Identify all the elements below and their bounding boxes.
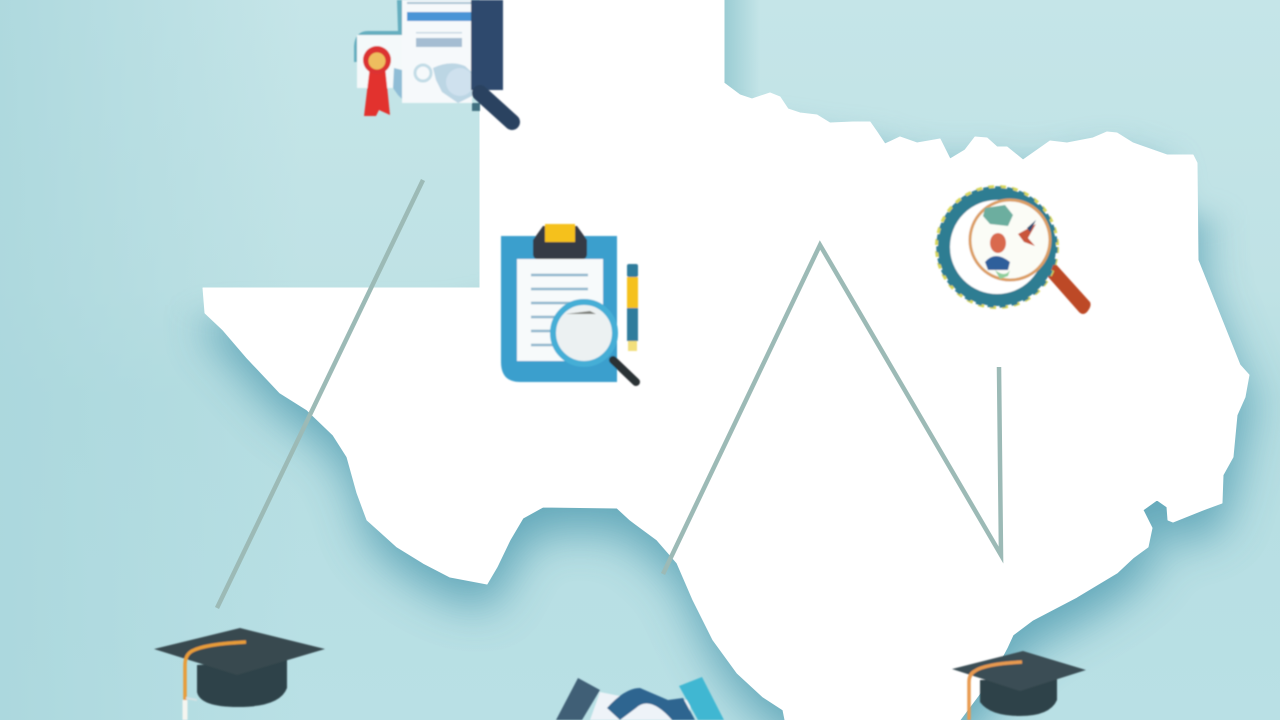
magnifier [553, 302, 636, 382]
tassel [969, 662, 1022, 720]
icon: seal with magnifier and people [936, 186, 1091, 314]
connector line: zigzag [663, 245, 1001, 574]
icon: handshake [556, 677, 724, 720]
map shadow [188, 120, 1275, 720]
tassel [185, 642, 246, 720]
connector line: left diagonal [217, 180, 423, 608]
icon: clipboard with magnifier and pen [501, 224, 638, 382]
background left tint [0, 0, 300, 720]
icon: certificate with ribbon and magnifier [354, 0, 512, 122]
ribbon [363, 46, 391, 116]
pen [627, 264, 638, 351]
icon: graduation cap left [154, 628, 325, 720]
small shadow by panhandle [724, 0, 760, 100]
icon: graduation cap right [952, 651, 1086, 720]
